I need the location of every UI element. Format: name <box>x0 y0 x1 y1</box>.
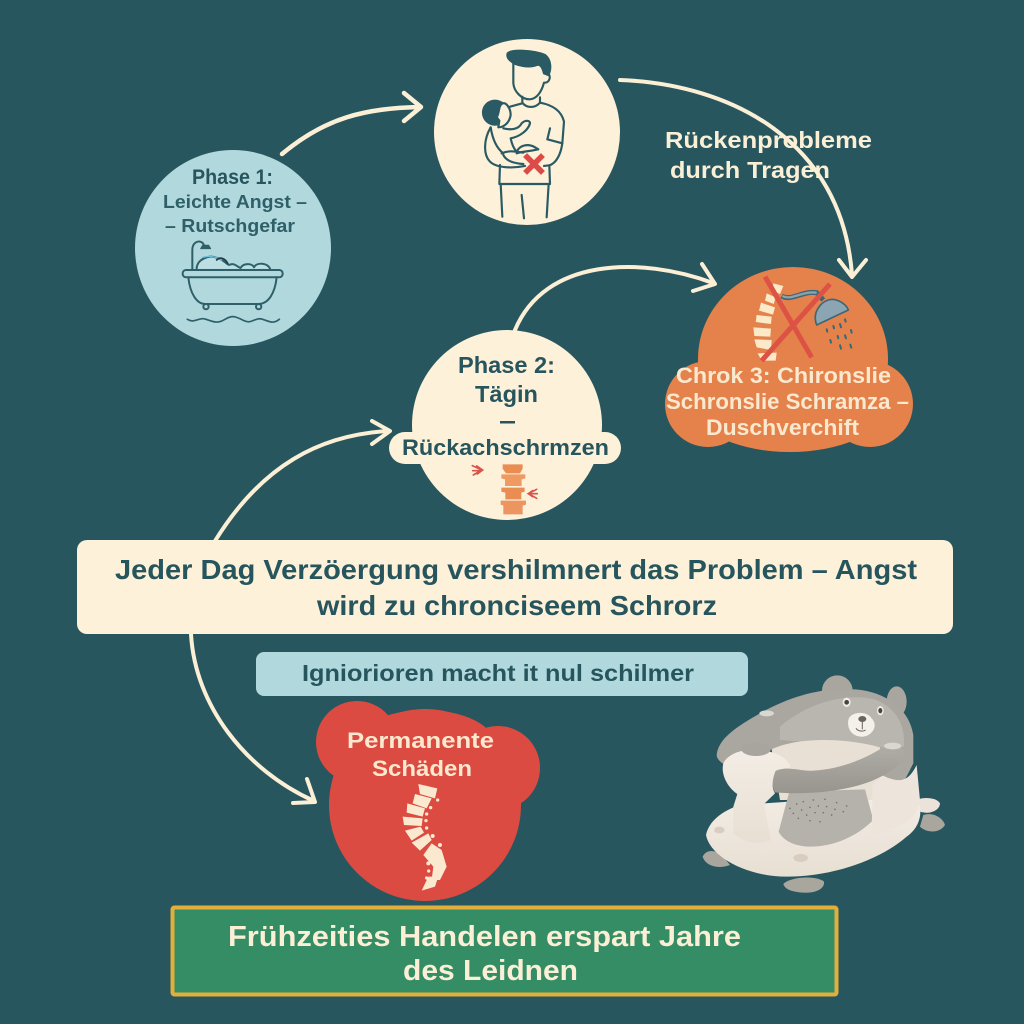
banner text: Jeder Dag Verzöergung vershilmnert das Problem – Angst <box>115 554 917 585</box>
phase 1 text: – Rutschgefar <box>165 216 295 236</box>
panel: phase 2 <box>389 330 621 520</box>
panel: phase 1 <box>135 150 331 346</box>
suction cups <box>703 814 945 893</box>
phase 3 text: Chrok 3: Chironslie <box>676 363 891 388</box>
call to action text <box>228 921 741 987</box>
banner text: wird zu chronciseem Schrorz <box>316 590 717 621</box>
callout: ignoring makes it worse: Igniorioren macht it nul schilmer <box>302 660 694 686</box>
phase 2 heading: Tägin <box>475 381 538 407</box>
phase 2 heading <box>458 352 555 424</box>
permanent damage heading: Schäden <box>372 756 472 781</box>
call to action text: des Leidnen <box>403 955 578 987</box>
arrow: banner to permanent damage <box>191 634 315 803</box>
call to action text: Frühzeities Handelen erspart Jahre <box>228 921 741 953</box>
banner: early action <box>172 908 836 994</box>
phase 1 text <box>163 192 307 236</box>
photo: bear bath seat <box>703 675 945 893</box>
icon: bathtub <box>183 242 283 322</box>
arrow: carrying to chronic <box>620 80 866 277</box>
phase 3 text: Duschverchift <box>706 415 860 440</box>
arrow: phase 1 to carrying <box>282 93 421 154</box>
phase 3 text <box>666 363 909 440</box>
permanent damage heading <box>347 728 494 781</box>
right post <box>872 765 920 833</box>
arrow: phase 2 to chronic <box>515 264 715 330</box>
label: back problems from carrying <box>665 127 872 183</box>
banner: delay warning <box>77 540 953 634</box>
icon: spine with pain arrows <box>472 464 537 514</box>
permanent damage heading: Permanente <box>347 728 494 753</box>
left pillar <box>723 750 791 843</box>
inner seat <box>772 740 883 800</box>
icon: man holding baby <box>483 51 564 218</box>
panel: carrying a baby <box>434 39 620 225</box>
banner text <box>115 554 917 621</box>
phase 2 label: Rückachschrmzen <box>402 435 609 460</box>
bear face <box>843 698 884 737</box>
phase 3 text: Schronslie Schramza – <box>666 389 909 414</box>
label: back problems from carrying: Rückenprobleme <box>665 127 872 153</box>
bear backrest <box>717 675 913 782</box>
panel: chronic phase 3 <box>665 267 913 452</box>
phase 1 text: Leichte Angst – <box>163 192 307 212</box>
icon: damaged spine <box>403 784 447 891</box>
phase 2 heading: Phase 2: <box>458 352 555 378</box>
front bar <box>772 744 904 793</box>
icon: red cross on lower back <box>527 157 541 171</box>
panel: permanent damage <box>316 701 540 901</box>
arrow: banner to phase 2 <box>215 421 390 541</box>
icon: crossed-out spine and shower <box>753 277 852 361</box>
phase 1 heading: Phase 1: <box>192 166 273 189</box>
seat base <box>706 793 920 877</box>
callout: ignoring makes it worse <box>256 652 748 696</box>
label: back problems from carrying: durch Tragen <box>670 157 830 183</box>
